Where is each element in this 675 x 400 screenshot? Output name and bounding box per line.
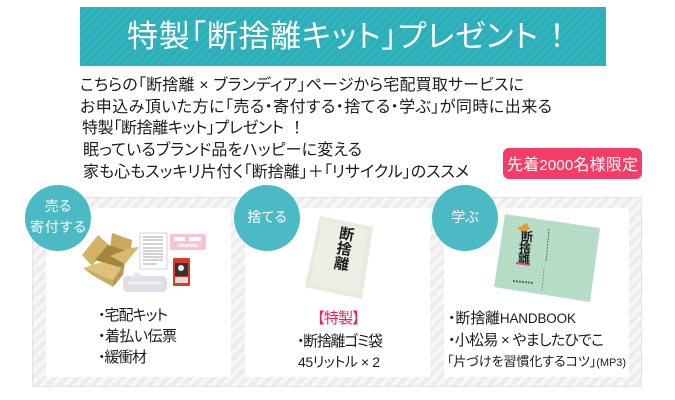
badge: throw away: 捨てる [247, 209, 287, 225]
kit contents panel [32, 198, 642, 386]
intro text block: 家も心もスッキリ片付く「断捨離」＋「リサイクル」のススメ [83, 163, 469, 181]
badge: sell or donate: 売る [45, 198, 71, 214]
icon: garbage bag [305, 216, 373, 299]
panel: sell or donate [46, 208, 231, 377]
item list: ・断捨離ゴミ袋 [297, 332, 383, 350]
icon: fragile sticker [173, 258, 190, 286]
panel: throw away [245, 208, 430, 377]
item list: ・宅配キット [98, 307, 168, 324]
icon: handbook [494, 214, 600, 302]
badge: sell or donate [25, 185, 91, 251]
icon: handbook: 断 [521, 230, 533, 244]
badge: learn [432, 185, 498, 251]
icon: garbage bag: 捨 [335, 239, 353, 259]
intro text block: お申込み頂いた方に「売る・寄付する・捨てる・学ぶ」が同時に出来る [80, 98, 552, 116]
item list: 【特製】 [317, 310, 360, 327]
item list: ・小松易 × やましたひでこ [448, 332, 604, 349]
limited offer badge [503, 148, 642, 179]
item list: ・断捨離HANDBOOK [448, 310, 576, 327]
item list [297, 310, 383, 370]
item list: ・着払い伝票 [98, 328, 177, 345]
item list [98, 307, 177, 366]
intro text block: 眠っているブランド品をハッピーに変える [83, 140, 362, 159]
icon: handbook: 離 [518, 251, 530, 266]
badge: sell or donate: 寄付する [30, 219, 86, 235]
item list: 45リットル × 2 [298, 354, 380, 370]
title: 特製「断捨離キット」プレゼント [127, 19, 538, 54]
panel: learn [444, 208, 629, 377]
title: ！ [549, 19, 565, 54]
icon: bubble wrap roll [123, 272, 167, 292]
item list [447, 310, 626, 369]
icon: pink label [170, 234, 206, 250]
icon: cardboard box [82, 233, 139, 287]
title banner [80, 7, 606, 66]
intro text block [80, 75, 552, 181]
icon: garbage bag: 断 [338, 225, 356, 245]
intro text block: こちらの「断捨離 × ブランディア」ページから宅配買取サービスに [80, 75, 524, 94]
badge: learn: 学ぶ [451, 209, 479, 225]
icon: garbage bag: 離 [333, 254, 351, 274]
intro text block: 特製「断捨離キット」プレゼント [82, 119, 284, 137]
intro text block: ！ [293, 120, 301, 137]
item list: 「片づけを習慣化するコツ」(MP3) [447, 354, 626, 369]
icon: shipping slip [140, 233, 167, 269]
badge: throw away [234, 185, 300, 251]
item list: ・緩衝材 [98, 349, 147, 366]
icon: handbook: 捨 [519, 240, 531, 255]
limited offer badge: 先着2000名様限定 [507, 156, 638, 174]
